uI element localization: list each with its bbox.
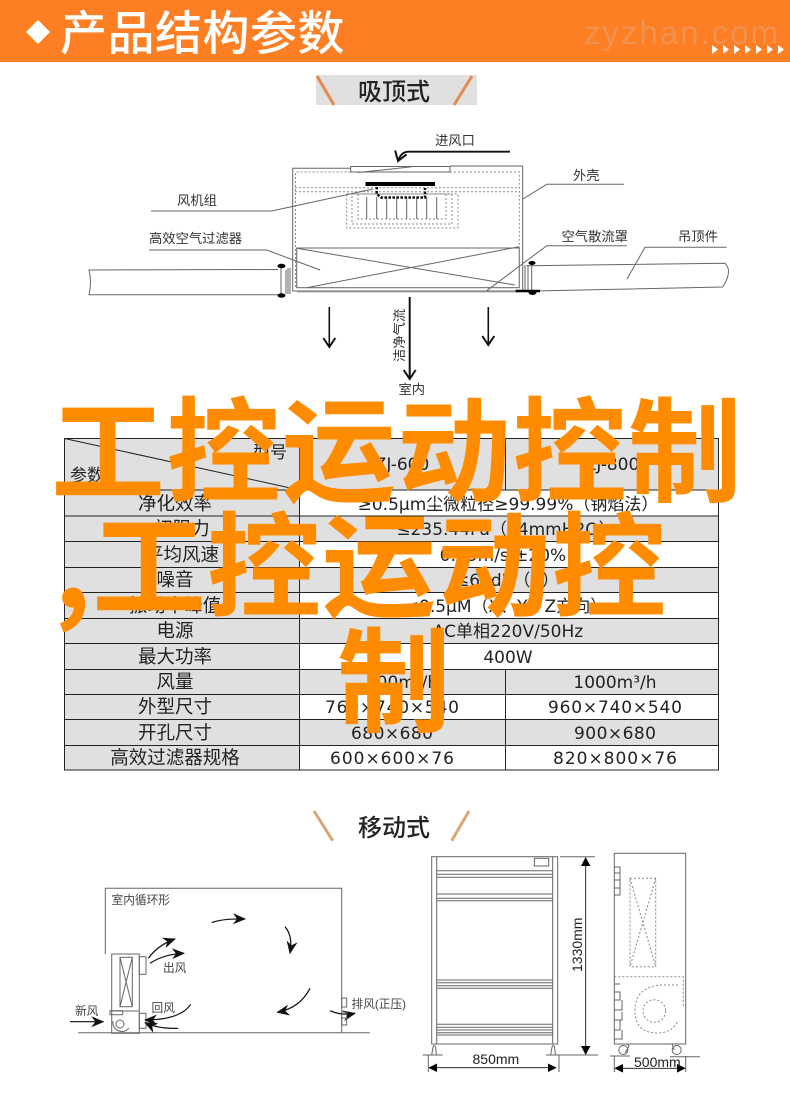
- table row labels: 噪音: [156, 566, 194, 592]
- label: 850mm: 850mm: [472, 1051, 519, 1067]
- chevron row: [712, 45, 784, 54]
- dimension lines: [423, 857, 598, 1072]
- left ceiling duct: [89, 264, 290, 298]
- depth arrow: [614, 1064, 686, 1073]
- table row shading: [64, 438, 718, 770]
- table values: 600×600×76: [330, 749, 454, 769]
- unit casing: [293, 166, 523, 292]
- table values: ≥0.5μm尘微粒径≥99.99%（钠焰法）: [358, 495, 658, 515]
- label: casing: [523, 168, 624, 199]
- diagram: room air circulation: [70, 888, 406, 1033]
- table row labels: 初阻力: [154, 515, 210, 541]
- section heading: ceiling type: [316, 72, 477, 107]
- header banner: [0, 0, 790, 64]
- table row labels: 平均风速: [145, 541, 219, 567]
- table row labels: [70, 438, 287, 770]
- table values: 0.45m/s ±20%: [440, 546, 566, 566]
- icon: diamond: [26, 20, 50, 44]
- purifier unit: [110, 954, 146, 1033]
- airflow arrows: [329, 297, 488, 379]
- fan unit: [366, 182, 435, 198]
- table values: 900×680: [574, 724, 656, 744]
- label: HEPA filter: 高效空气过滤器: [149, 230, 242, 246]
- table grid: [64, 438, 718, 770]
- orange overlay headline: 制: [337, 591, 451, 756]
- width arrow: [428, 1064, 557, 1072]
- diagram: side elevation: [610, 853, 700, 1073]
- table values: 960×740×540: [548, 698, 682, 718]
- filter cross: [630, 878, 656, 967]
- dashed internals: [295, 172, 520, 287]
- section heading: ceiling type: 吸顶式: [358, 72, 430, 107]
- cabinet frame: [432, 857, 558, 1055]
- casters: [619, 1044, 681, 1054]
- intake arrow: [398, 152, 510, 161]
- table values: ≤235.44Pa（24mmH2O）: [396, 520, 616, 540]
- label: casing: 外壳: [573, 168, 600, 183]
- table row labels: 振动半峰值: [129, 592, 221, 618]
- table values: 760×740×540: [325, 698, 459, 718]
- table row labels: 高效过滤器规格: [110, 744, 240, 770]
- label: outlet air: 出风: [163, 961, 187, 975]
- table row labels: 型号: [253, 438, 287, 463]
- table values: ≤62dB（A）: [455, 571, 559, 591]
- table values: ZJ-600: [375, 455, 429, 475]
- table values: ZJ-800: [585, 455, 639, 475]
- label: clean airflow: 洁净气流: [392, 309, 407, 362]
- label: ceiling part: [627, 229, 727, 279]
- section heading: mobile type: [314, 808, 469, 843]
- table row labels: 电源: [156, 617, 194, 643]
- table values: 800m³/h: [366, 673, 438, 693]
- label: diffuser: [487, 229, 628, 291]
- label: fan group: [151, 189, 373, 211]
- watermark: zyzhan.com: [584, 14, 780, 51]
- room outline: [78, 888, 370, 1033]
- label: 500mm: 500mm: [634, 1054, 681, 1070]
- label: diffuser: 空气散流罩: [562, 229, 628, 244]
- orange overlay headline: 工控运动控制: [51, 361, 742, 526]
- label: return air: 回风: [152, 1002, 175, 1015]
- exhaust vent: [342, 998, 347, 1025]
- table row labels: 最大功率: [138, 643, 212, 669]
- table row labels: 外型尺寸: [138, 693, 212, 719]
- circulation arrows: [70, 919, 355, 1028]
- right ceiling duct: [516, 261, 728, 295]
- table row labels: 净化效率: [138, 490, 212, 516]
- comb vents: [614, 867, 622, 1039]
- table row labels: 开孔尺寸: [138, 719, 212, 745]
- label: indoor: 室内: [398, 381, 425, 397]
- table values: 820×800×76: [553, 749, 677, 769]
- table values: 1000m³/h: [573, 673, 657, 693]
- label: exhaust: 排风(正压): [352, 997, 406, 1011]
- table row labels: 风量: [156, 668, 194, 694]
- label: fan group: 风机组: [177, 193, 217, 208]
- label: indoor circulation: 室内循环形: [112, 893, 170, 907]
- label: air intake: 进风口: [435, 133, 475, 148]
- section heading: mobile type: 移动式: [358, 808, 430, 843]
- side panel: [614, 853, 686, 1044]
- label: HEPA filter: [149, 230, 320, 270]
- orange overlay headline: ,工控运动控: [54, 476, 666, 641]
- table values: 680×680: [351, 724, 433, 744]
- diagram: front elevation: [423, 857, 598, 1072]
- spec table: [64, 438, 718, 770]
- orange overlay headline: [51, 361, 742, 756]
- diagram: ceiling unit: [89, 133, 728, 397]
- label: fresh air: 新风: [75, 1004, 99, 1018]
- label: 1330mm: 1330mm: [569, 918, 585, 972]
- blower housing: [614, 977, 683, 1033]
- table row labels: 参数: [70, 461, 104, 486]
- table values: [325, 455, 682, 769]
- label: ceiling part: 吊顶件: [678, 229, 718, 244]
- table values: AC单相220V/50Hz: [433, 622, 583, 642]
- table values: ≤0.5μM（X、Y、Z方向）: [405, 597, 607, 617]
- dimension lines: [610, 1056, 700, 1072]
- table values: 400W: [483, 648, 533, 668]
- height arrow: [581, 857, 590, 1055]
